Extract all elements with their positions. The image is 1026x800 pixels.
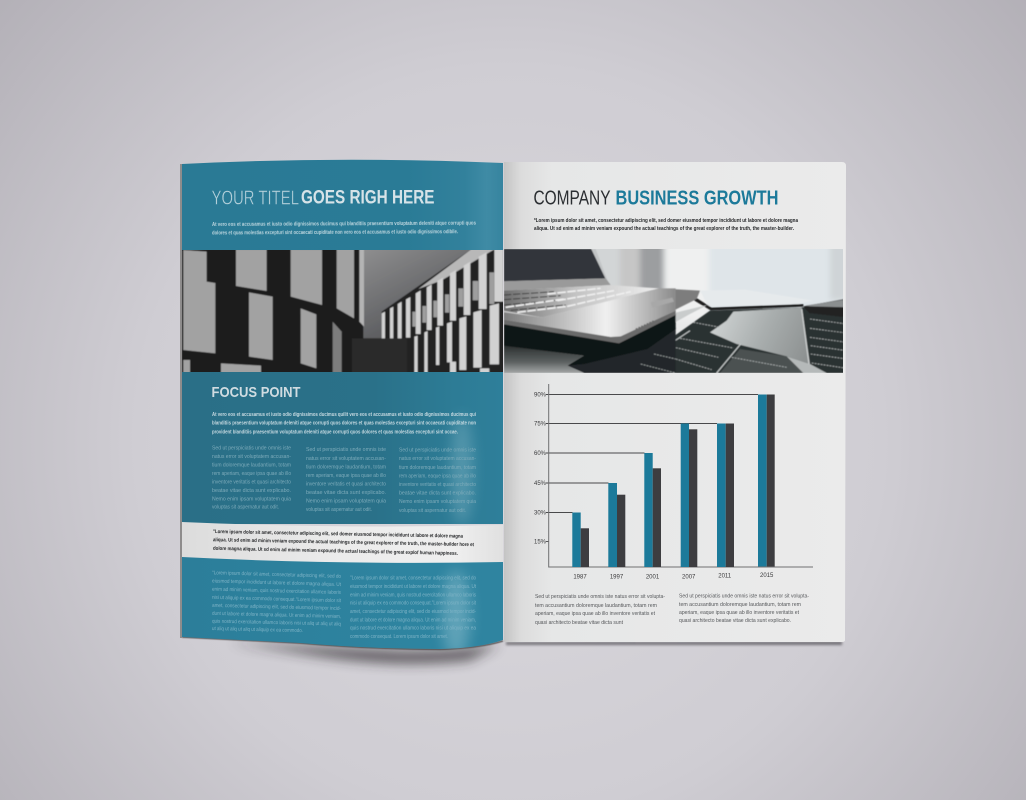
intro quote: *Lorem ipsum dolor sit amet, consectetur adipiscing elit, sed domer eiusmod tempor incididunt ut labore et dolore magna <box>534 218 798 224</box>
text columns: Sed ut perspiciatis unde omnis iste <box>399 448 476 454</box>
guide lines <box>546 394 758 542</box>
value axis labels: 75% <box>534 422 547 428</box>
focus paragraph: blanditiis praesentium voluptatum deleniti atque corrupti quos dolores et quas molestias excepturi sint occaecati cupiditate non <box>212 421 476 427</box>
heading: focus point: FOCUS POINT <box>212 384 300 401</box>
value axis labels: 15% <box>534 540 547 546</box>
focus paragraph: provident blanditiis praesentium voluptatum deleniti atque corrupti quos dolores et quas molestias excepturi sint occae. <box>212 429 459 435</box>
text columns: rem aperiam, eaque ipsa quae ab illo <box>212 471 291 477</box>
lower text columns: eiusmod tempor incididunt ut labore et dolore magna aliqua. Ut <box>350 584 476 590</box>
text columns: Sed ut perspiciatis unde omnis iste <box>212 446 291 452</box>
bars: 2011 <box>717 424 734 567</box>
axes <box>549 384 813 567</box>
lower text columns: amet, consectetur adipiscing elit, sed do eiusmod tempor incid- <box>350 609 476 615</box>
text columns: Nemo enim ipsam voluptatem quia <box>306 498 386 504</box>
value axis labels: 60% <box>534 451 547 457</box>
bottom text column left: quasi architecto beatae vitae dicta sunt <box>535 620 623 626</box>
year labels: 2015 <box>760 573 774 579</box>
bars: 1987 <box>572 512 589 567</box>
year labels: 2011 <box>718 574 732 580</box>
year labels: 2001 <box>646 574 660 580</box>
text columns: inventore veritatis et quasi architecto <box>399 482 476 488</box>
heading: your titel: YOUR TITEL <box>212 188 299 210</box>
text columns: natus error sit voluptatem accusan- <box>212 454 291 460</box>
year labels: 2007 <box>682 574 696 580</box>
lower text columns: dunt ut labore et dolore magna aliqua. Ut enim ad minim veniam, <box>212 611 341 620</box>
value axis labels: 90% <box>534 392 547 398</box>
text columns <box>212 446 476 514</box>
lower text columns: nisi ut aliquip ex ea commodo consequat."Lorem ipsum dolor sit <box>212 595 342 604</box>
left page <box>180 155 505 660</box>
lower text columns: dunt ut labore et dolore magna aliqua. Ut enim ad minim veniam, <box>350 617 476 623</box>
lower text columns: quis nostrud exercitation ullamco laboris nisi ut aliq ut aliq ut aliq <box>212 619 341 628</box>
bars: 2015 <box>758 394 775 566</box>
text columns: Nemo enim ipsam voluptatem quia <box>399 499 476 505</box>
bottom text column right: Sed ut perspiciatis unde omnis iste natus error sit volupta- <box>679 593 809 599</box>
text columns: rem aperiam, eaque ipsa quae ab illo <box>399 473 476 479</box>
value axis labels <box>534 392 547 546</box>
white quote band: dolore magna aliqua. Ut sd enim ad minim veniam expound the actual teachings of the great explof human happiness. <box>213 546 459 557</box>
lower text columns: "Lorem ipsum dolor sit amet, consectetur adipiscing elit, sed do <box>350 576 476 582</box>
white quote band <box>182 522 503 563</box>
bottom text column left: aperiam, eaque ipsa quae ab illo inventore veritatis et <box>535 611 655 617</box>
intro text: dolores et quas molestias excepturi sint occaecati cupiditate non vero eos et accusamus et iusto odio dignissimos odibile. <box>212 229 459 236</box>
photo: laptop on desk <box>504 240 850 373</box>
heading: company business growth: COMPANY <box>534 188 610 210</box>
lower text columns: amet, consectetur adipiscing elit, sed do eiusmod tempor incid- <box>212 603 341 612</box>
page shadows <box>182 637 842 663</box>
intro quote: aliqua. Ut sd enim ad minim veniam expound the actual teachings of the great explorer of the truth, the master-builder. <box>534 226 795 232</box>
year labels: 1997 <box>610 574 624 580</box>
white quote band: aliqua. Ut sd enim ad minim veniam expound the actual teachings of the great explorer of the truth, the master-builder hore et <box>213 537 474 548</box>
right page <box>504 162 850 642</box>
lower text columns: "Lorem ipsum dolor sit amet, consectetur adipiscing elit, sed do <box>212 570 341 580</box>
bottom text column right: aperiam, eaque ipsa quae ab illo inventore veritatis et <box>679 610 799 616</box>
lower text columns: enim ad minim veniam, quis nostrud exercitation ullamco laboris <box>350 592 476 598</box>
bottom text column right: tem accusantium doloremque laudantium, totam rem <box>679 602 801 608</box>
text columns: natus error sit voluptatem accusan- <box>306 456 386 462</box>
text columns: Sed ut perspiciatis unde omnis iste <box>306 447 386 453</box>
value axis labels: 30% <box>534 510 547 516</box>
bottom text column left: tem accusantium doloremque laudantium, totam rem <box>535 603 657 609</box>
bottom text column right: quasi architecto beatae vitae dicta sunt explicabo. <box>679 618 791 624</box>
focus paragraph <box>212 412 477 435</box>
lower text columns: commodo consequat. Lorem ipsum dolor sit amet. <box>350 634 448 640</box>
intro text <box>212 221 476 236</box>
lower text columns: eiusmod tempor incididunt ut labore et dolore magna aliqua. Ut <box>212 578 342 588</box>
heading: your titel <box>212 186 434 210</box>
year labels: 1987 <box>573 574 587 580</box>
bars: 1997 <box>608 483 625 567</box>
heading: your titel: GOES RIGH HERE <box>301 186 434 208</box>
lower text columns <box>212 570 476 640</box>
lower text columns: nisi ut aliquip ex ea commodo consequat."Lorem ipsum dolor sit <box>350 601 476 607</box>
lower text columns: enim ad minim veniam, quis nostrud exercitation ullamco laboris <box>212 587 341 596</box>
text columns: tium doloremque laudantium, totam <box>306 464 386 470</box>
text columns: tium doloremque laudantium, totam <box>212 463 291 469</box>
text columns: beatae vitae dicta sunt explicabo. <box>212 488 291 494</box>
bars: 2007 <box>681 424 697 567</box>
bar chart <box>534 384 813 580</box>
bottom text column left <box>535 594 665 626</box>
text columns: natus error sit voluptatem accusan- <box>399 456 476 462</box>
text columns: Nemo enim ipsam voluptatem quia <box>212 497 291 503</box>
year labels <box>573 573 774 580</box>
bottom text column left: Sed ut perspiciatis unde omnis iste natus error sit volupta- <box>535 594 665 600</box>
text columns: voluptas sit aspernatur aut odit. <box>306 507 372 513</box>
photo: building facade <box>182 248 505 373</box>
text columns: beatae vitae dicta sunt explicabo. <box>306 490 386 496</box>
intro quote <box>534 218 798 232</box>
bottom text column right <box>679 593 809 624</box>
text columns: tium doloremque laudantium, totam <box>399 465 476 471</box>
heading: company business growth <box>534 188 778 210</box>
text columns: voluptas sit aspernatur aut odit. <box>212 505 279 511</box>
focus paragraph: At vero eos et accusamus et iusto odio dignissimos ducimus quilit vero eos et accusamus et iusto odio dignissimos ducimus qui <box>212 412 477 418</box>
text columns: inventore veritatis et quasi architecto <box>212 480 291 486</box>
lower text columns: ut aliq ut aliq ut aliq ut aliquip ex ea commodo. <box>212 626 303 634</box>
white quote band: "Lorem ipsum dolor sit amet, consectetur adipiscing elit, sed domer eiusmod tempor incididunt ut labore et dolore magna <box>213 529 463 540</box>
value axis labels: 45% <box>534 481 547 487</box>
lower text columns: quis nostrud exercitation ullamco laboris nisi ut aliquip ex ea <box>350 626 476 632</box>
bars: 2001 <box>644 453 661 567</box>
text columns: inventore veritatis et quasi architecto <box>306 481 386 487</box>
intro text: At vero eos et accusamus et iusto odio dignissimos ducimus qui blanditiis praesentium voluptatum deleniti atque corrupti quos <box>212 221 476 228</box>
text columns: rem aperiam, eaque ipsa quae ab illo <box>306 473 386 479</box>
text columns: beatae vitae dicta sunt explicabo. <box>399 490 476 496</box>
heading: company business growth: BUSINESS GROWTH <box>616 188 778 210</box>
text columns: voluptas sit aspernatur aut odit. <box>399 508 466 514</box>
